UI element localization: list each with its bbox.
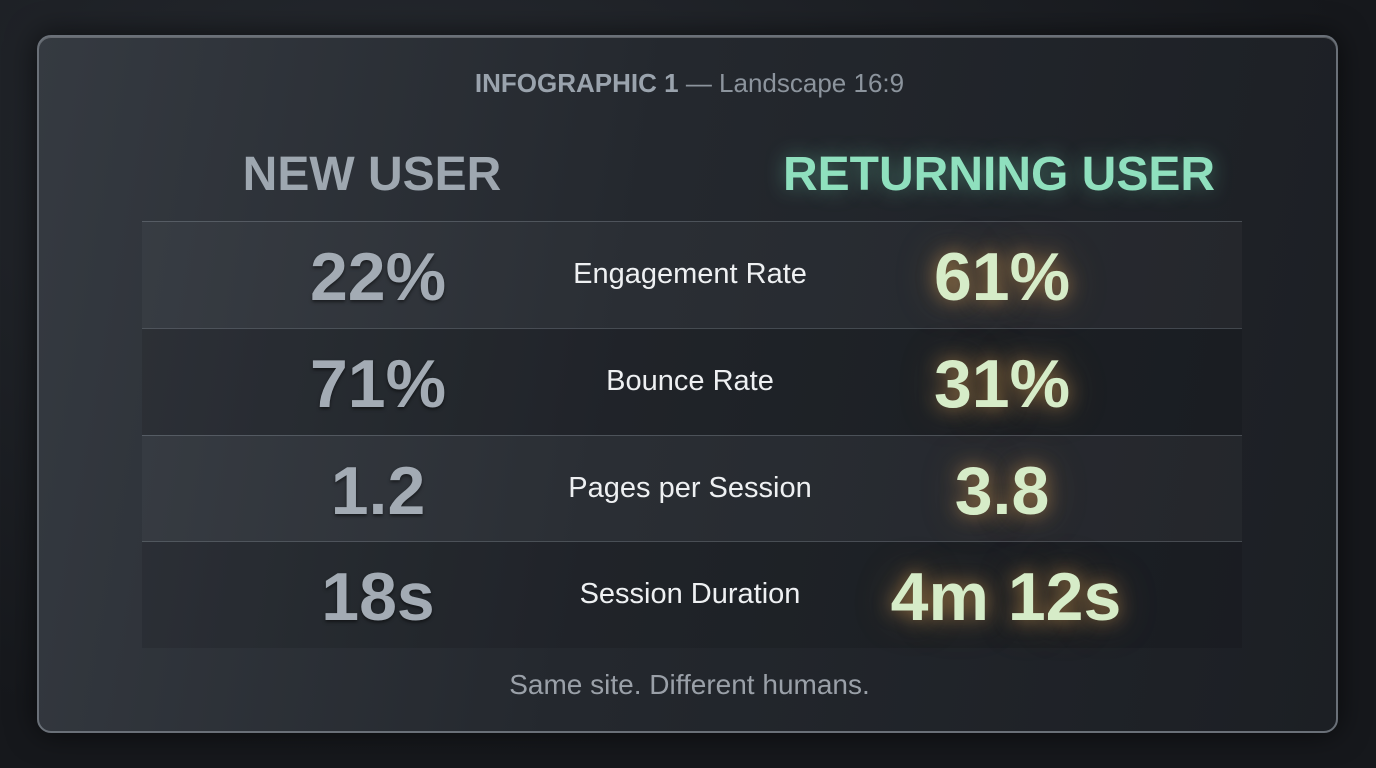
row: engagement rate: 61% bbox=[934, 239, 1070, 315]
row: session duration: Session Duration bbox=[580, 578, 800, 610]
row: engagement rate: 22% bbox=[310, 239, 446, 315]
title: INFOGRAPHIC 1 — Landscape 16:9 bbox=[475, 68, 904, 98]
row: bounce rate: Bounce Rate bbox=[606, 365, 774, 397]
row: engagement rate bbox=[142, 221, 1242, 328]
row: pages per session: Pages per Session bbox=[568, 472, 812, 504]
footer tagline: Same site. Different humans. bbox=[509, 669, 870, 700]
row: bounce rate: 71% bbox=[310, 346, 446, 422]
row: session duration bbox=[142, 541, 1242, 648]
row: bounce rate: 31% bbox=[934, 346, 1070, 422]
row: bounce rate bbox=[142, 328, 1242, 435]
row: pages per session: 3.8 bbox=[955, 453, 1049, 529]
row: session duration: 18s bbox=[321, 559, 435, 635]
row: pages per session: 1.2 bbox=[331, 453, 425, 529]
header: new user: NEW USER bbox=[243, 148, 501, 201]
row: pages per session bbox=[142, 435, 1242, 542]
row: engagement rate: Engagement Rate bbox=[573, 258, 807, 290]
header: returning user: RETURNING USER bbox=[783, 148, 1215, 201]
row: session duration: 4m 12s bbox=[891, 559, 1121, 635]
